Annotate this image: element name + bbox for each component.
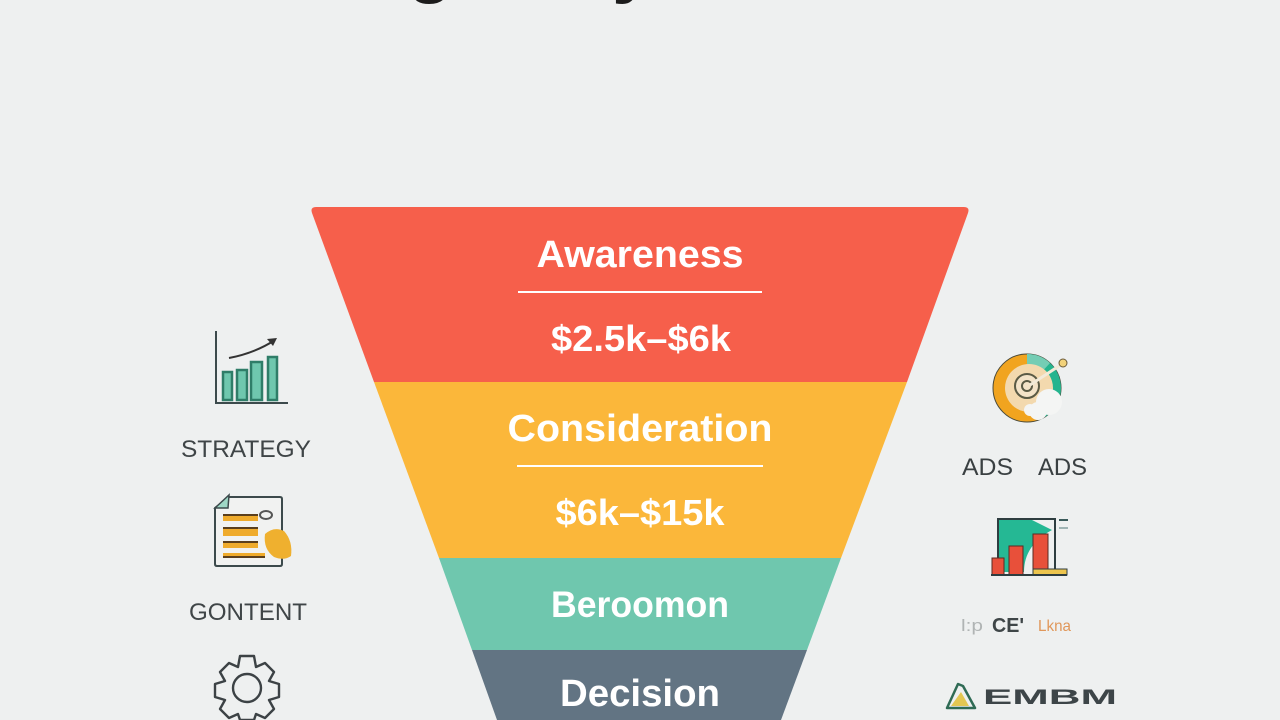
funnel stage: Retention: Beroomon (551, 584, 729, 625)
label: strategy: STRATEGY (181, 436, 311, 463)
left column: icon: gear (215, 656, 279, 720)
icon: document with note (215, 495, 291, 566)
right column: garbled caption (961, 615, 1071, 637)
funnel stage: Retention (439, 558, 841, 650)
right column: garbled caption: CE' (992, 615, 1024, 637)
left column: strategy (181, 331, 311, 463)
right column: icon: rising bars (991, 519, 1068, 576)
funnel stage: Consideration (374, 382, 907, 558)
label: ads ads (962, 454, 1087, 481)
funnel stage: Decision (472, 650, 807, 720)
label: content: GONTENT (189, 599, 307, 626)
funnel (312, 207, 968, 720)
funnel stage: Awareness: Awareness (536, 234, 744, 276)
funnel stage: Decision: Decision (560, 673, 720, 715)
funnel stage: Awareness: $2.5k–$6k (551, 318, 732, 359)
right column: ads (962, 354, 1087, 481)
icon: target with dart (993, 354, 1067, 422)
funnel stage: Awareness (312, 207, 968, 382)
icon: bar chart with arrow (216, 331, 288, 403)
funnel stage: Consideration: Consideration (508, 408, 772, 450)
right column: garbled caption: l:p (961, 616, 983, 635)
label: ads ads: ADS (1038, 454, 1087, 481)
title (cropped at top edge) (407, 0, 654, 5)
icon: logo mountain (947, 684, 975, 708)
label: ads ads: ADS (962, 454, 1013, 481)
right column: logo with wordmark (947, 684, 1117, 709)
wordmark: EMBM (983, 686, 1117, 709)
left column: content (189, 495, 307, 626)
funnel stage: Consideration: $6k–$15k (556, 492, 726, 533)
right column: garbled caption: Lkna (1038, 618, 1071, 635)
